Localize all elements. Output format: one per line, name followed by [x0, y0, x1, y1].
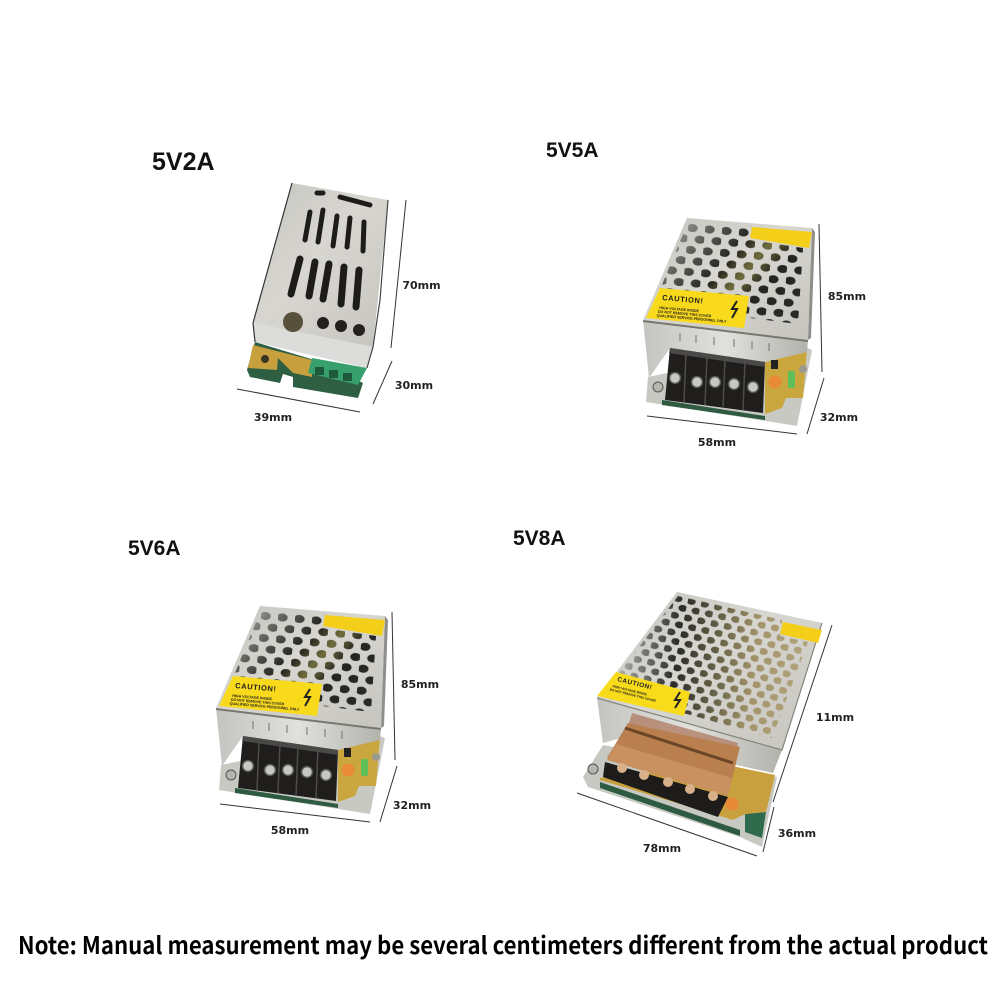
- caution label: [597, 672, 690, 716]
- yellow board: [600, 765, 775, 820]
- heading: 5V8A: 5V8A: [513, 527, 566, 550]
- copper reflection: [628, 713, 738, 757]
- yellow board: [248, 345, 312, 377]
- label: 11mm: 11mm: [816, 711, 854, 724]
- top cover: [253, 183, 388, 347]
- caution label: HIGH VOLTAGE INSIDE: [612, 684, 647, 697]
- base plate: [583, 745, 777, 847]
- label: 30mm: 30mm: [395, 379, 433, 392]
- caution label text: DO NOT REMOVE THIS COVER: [231, 698, 285, 706]
- front face: [597, 698, 782, 773]
- dimension lines: 5V8A: [577, 625, 832, 856]
- caution label text: DO NOT REMOVE THIS COVER: [658, 310, 712, 318]
- dimension lines: 5V2A: [237, 200, 406, 412]
- terminal block: [603, 762, 728, 817]
- caution label text: [656, 293, 729, 324]
- caution label text: QUALIFIED SERVICE PERSONNEL ONLY: [229, 702, 300, 712]
- top cover: [597, 592, 822, 750]
- heading: 5V5A: 5V5A: [546, 139, 599, 162]
- dimension lines: 5V6A: [220, 612, 397, 822]
- heading: 5V6A: 5V6A: [128, 537, 181, 560]
- label: 58mm: 58mm: [271, 824, 309, 837]
- green board edge: [600, 782, 740, 836]
- green circuit board: [247, 342, 363, 398]
- slots: [291, 193, 370, 307]
- product: 5V8A power supply: [583, 592, 822, 847]
- product: 5V5A power supply: [643, 218, 815, 426]
- label: 78mm: 78mm: [643, 842, 681, 855]
- screws: [617, 763, 718, 801]
- caution label: DO NOT REMOVE THIS COVER: [609, 688, 657, 703]
- yellow sticker: [780, 622, 822, 643]
- caution label text: HIGH VOLTAGE INSIDE: [232, 694, 273, 701]
- copper cover: [607, 723, 740, 795]
- caution label: CAUTION!: [617, 676, 653, 692]
- front face: [253, 323, 373, 368]
- label: 39mm: 39mm: [254, 411, 292, 424]
- label: 58mm: 58mm: [698, 436, 736, 449]
- label: 70mm: 70mm: [402, 279, 441, 292]
- heading: 5V2A: 5V2A: [152, 148, 215, 176]
- orange component: [726, 798, 738, 810]
- label: 85mm: 85mm: [401, 678, 439, 691]
- caution label text: QUALIFIED SERVICE PERSONNEL ONLY: [656, 314, 727, 324]
- caution label text: CAUTION!: [235, 681, 277, 694]
- label: 32mm: 32mm: [393, 799, 431, 812]
- round holes: [283, 312, 365, 336]
- caution label text: CAUTION!: [662, 293, 704, 306]
- label: 36mm: 36mm: [778, 827, 816, 840]
- green terminal: [308, 358, 367, 385]
- caution label text: HIGH VOLTAGE INSIDE: [659, 306, 700, 313]
- caution label text: [229, 681, 302, 712]
- dimension lines: 5V5A: [647, 224, 824, 434]
- product: 5V2A power supply: [247, 183, 388, 398]
- label: 32mm: 32mm: [820, 411, 858, 424]
- label: 85mm: 85mm: [828, 290, 866, 303]
- product: 5V6A power supply: [216, 606, 388, 814]
